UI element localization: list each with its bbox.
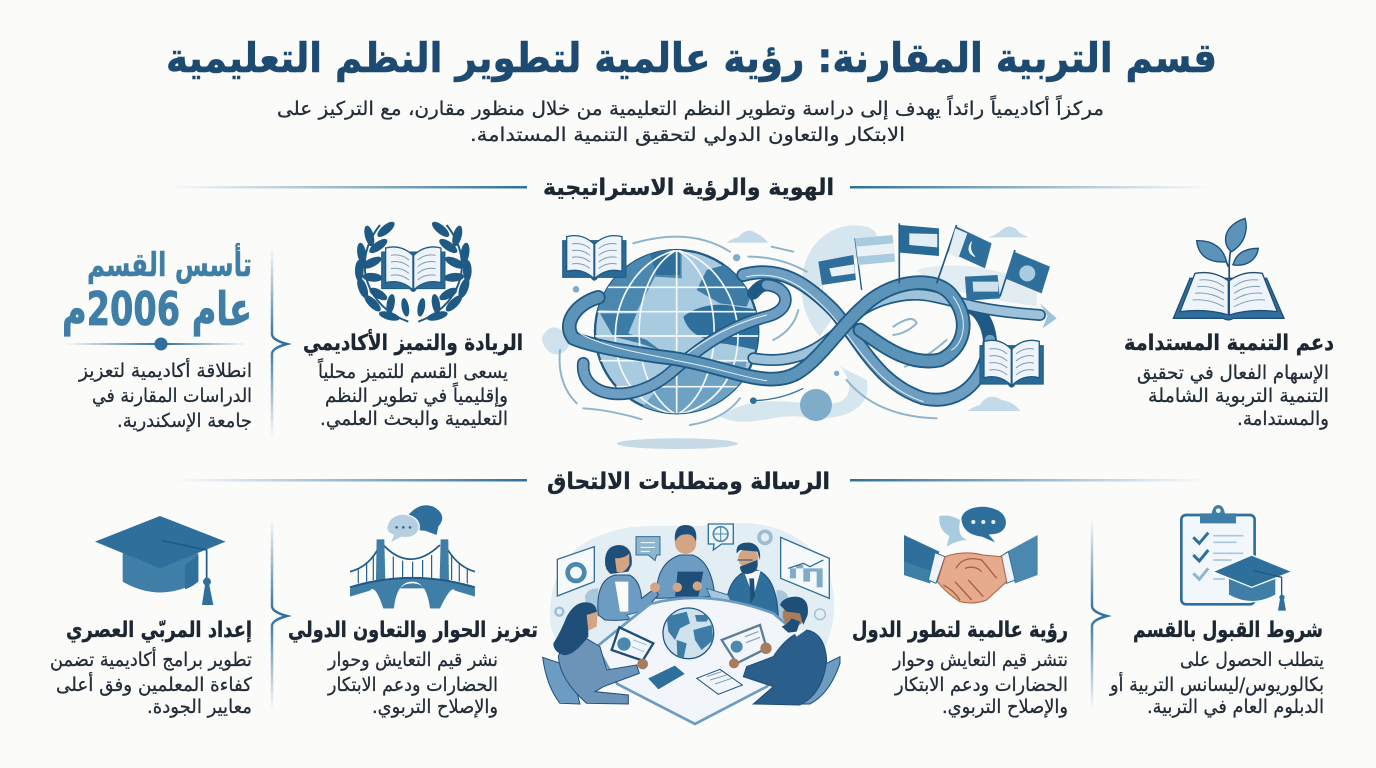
illustration: globe and infinity ribbons (542, 223, 1057, 449)
body text (1109, 649, 1324, 718)
body text: بكالوريوس/ليسانس التربية أو (1109, 672, 1324, 696)
body text: التعليمية والبحث العلمي. (320, 408, 508, 430)
intro paragraph (277, 95, 1104, 146)
body text: نشر قيم التعايش وحوار (327, 649, 498, 671)
founding text (78, 358, 252, 432)
body text: وإقليمياً في تطوير النظم (325, 382, 508, 408)
icon: handshake with speech bubbles (904, 506, 1038, 603)
person: bottom left woman (543, 602, 653, 704)
section heading: mission and admission: الرسالة ومتطلبات الالتحاق (547, 469, 830, 495)
body text: والإصلاح التربوي. (942, 696, 1068, 718)
icon: book with plant (1173, 218, 1284, 320)
person: right man (707, 543, 788, 627)
founding text: جامعة الإسكندرية. (117, 410, 252, 432)
wall screens and bubbles (555, 524, 829, 620)
person: left woman (585, 545, 660, 630)
icon: clipboard with graduation cap (1181, 505, 1292, 611)
heading: رؤية عالمية لتطور الدول (852, 618, 1068, 643)
heading: إعداد المربّي العصري (66, 618, 252, 643)
heading: تعزيز الحوار والتعاون الدولي (288, 618, 538, 643)
heading: شروط القبول بالقسم (1133, 618, 1323, 643)
body text: الدبلوم العام في التربية. (1147, 696, 1324, 718)
bracket divider (272, 247, 287, 437)
table items (647, 665, 742, 694)
founding text: انطلاقة أكاديمية لتعزيز (78, 358, 252, 382)
body text: كفاءة المعلمين وفق أعلى (56, 672, 253, 696)
panel: academic excellence (303, 219, 523, 430)
body text: الإسهام الفعال في تحقيق (1137, 362, 1329, 384)
body text: الحضارات ودعم الابتكار (894, 674, 1068, 696)
founding text: الدراسات المقارنة في (92, 385, 252, 407)
panel: modern educator (50, 516, 253, 718)
background blob (550, 523, 834, 657)
globe (593, 248, 760, 420)
heading: الريادة والتميز الأكاديمي (303, 328, 523, 356)
illustration: team meeting around table (543, 523, 840, 724)
section heading: identity and vision: الهوية والرؤية الاستراتيجية (543, 175, 834, 201)
body text: تطوير برامج أكاديمية تضمن (50, 647, 252, 671)
intro paragraph: مركزاً أكاديمياً رائداً يهدف إلى دراسة وتطوير النظم التعليمية من خلال منظور مقارن، مع التركيز على (277, 95, 1104, 121)
body text: نتشر قيم التعايش وحوار (892, 649, 1068, 671)
body text: يسعى القسم للتميز محلياً (318, 358, 508, 383)
founded year: عام 2006م (62, 282, 252, 336)
intro paragraph: الابتكار والتعاون الدولي لتحقيق التنمية المستدامة. (470, 124, 905, 146)
panel: sustainable development (1124, 218, 1334, 430)
body text: يتطلب الحصول على (1180, 649, 1324, 671)
panel: global vision (852, 506, 1068, 718)
body text: والمستدامة. (1237, 408, 1329, 430)
bracket divider (1092, 518, 1107, 710)
panel: founding year (62, 243, 252, 432)
table (597, 598, 807, 724)
title: قسم التربية المقارنة: رؤية عالمية لتطوير النظم التعليمية (166, 34, 1217, 83)
panel: dialogue and cooperation (288, 505, 538, 718)
body text (892, 649, 1068, 718)
globe on table (663, 608, 714, 660)
body text (50, 647, 253, 718)
bracket divider (272, 518, 287, 710)
body text: التنمية التربوية الشاملة (1148, 385, 1329, 407)
person: bottom right man (722, 597, 840, 705)
body text (318, 358, 508, 430)
person: centre (657, 525, 715, 598)
body text: الحضارات ودعم الابتكار (327, 674, 498, 696)
body text: معايير الجودة. (147, 696, 252, 718)
icon: laurel with book (355, 219, 472, 323)
books (563, 236, 1043, 387)
flags (818, 223, 1050, 301)
icon: graduation cap (95, 516, 226, 605)
body text: والإصلاح التربوي. (372, 696, 498, 718)
panel: admission requirements (1109, 505, 1324, 718)
infinity ribbons (569, 272, 1057, 402)
founded label: تأسس القسم (87, 243, 252, 284)
arrow head (1040, 303, 1057, 328)
body text (1137, 362, 1329, 430)
background swirls (542, 225, 1037, 449)
heading: دعم التنمية المستدامة (1124, 331, 1334, 356)
dot divider (65, 338, 247, 350)
icon: bridge with speech bubbles (350, 505, 475, 608)
body text (327, 649, 498, 718)
